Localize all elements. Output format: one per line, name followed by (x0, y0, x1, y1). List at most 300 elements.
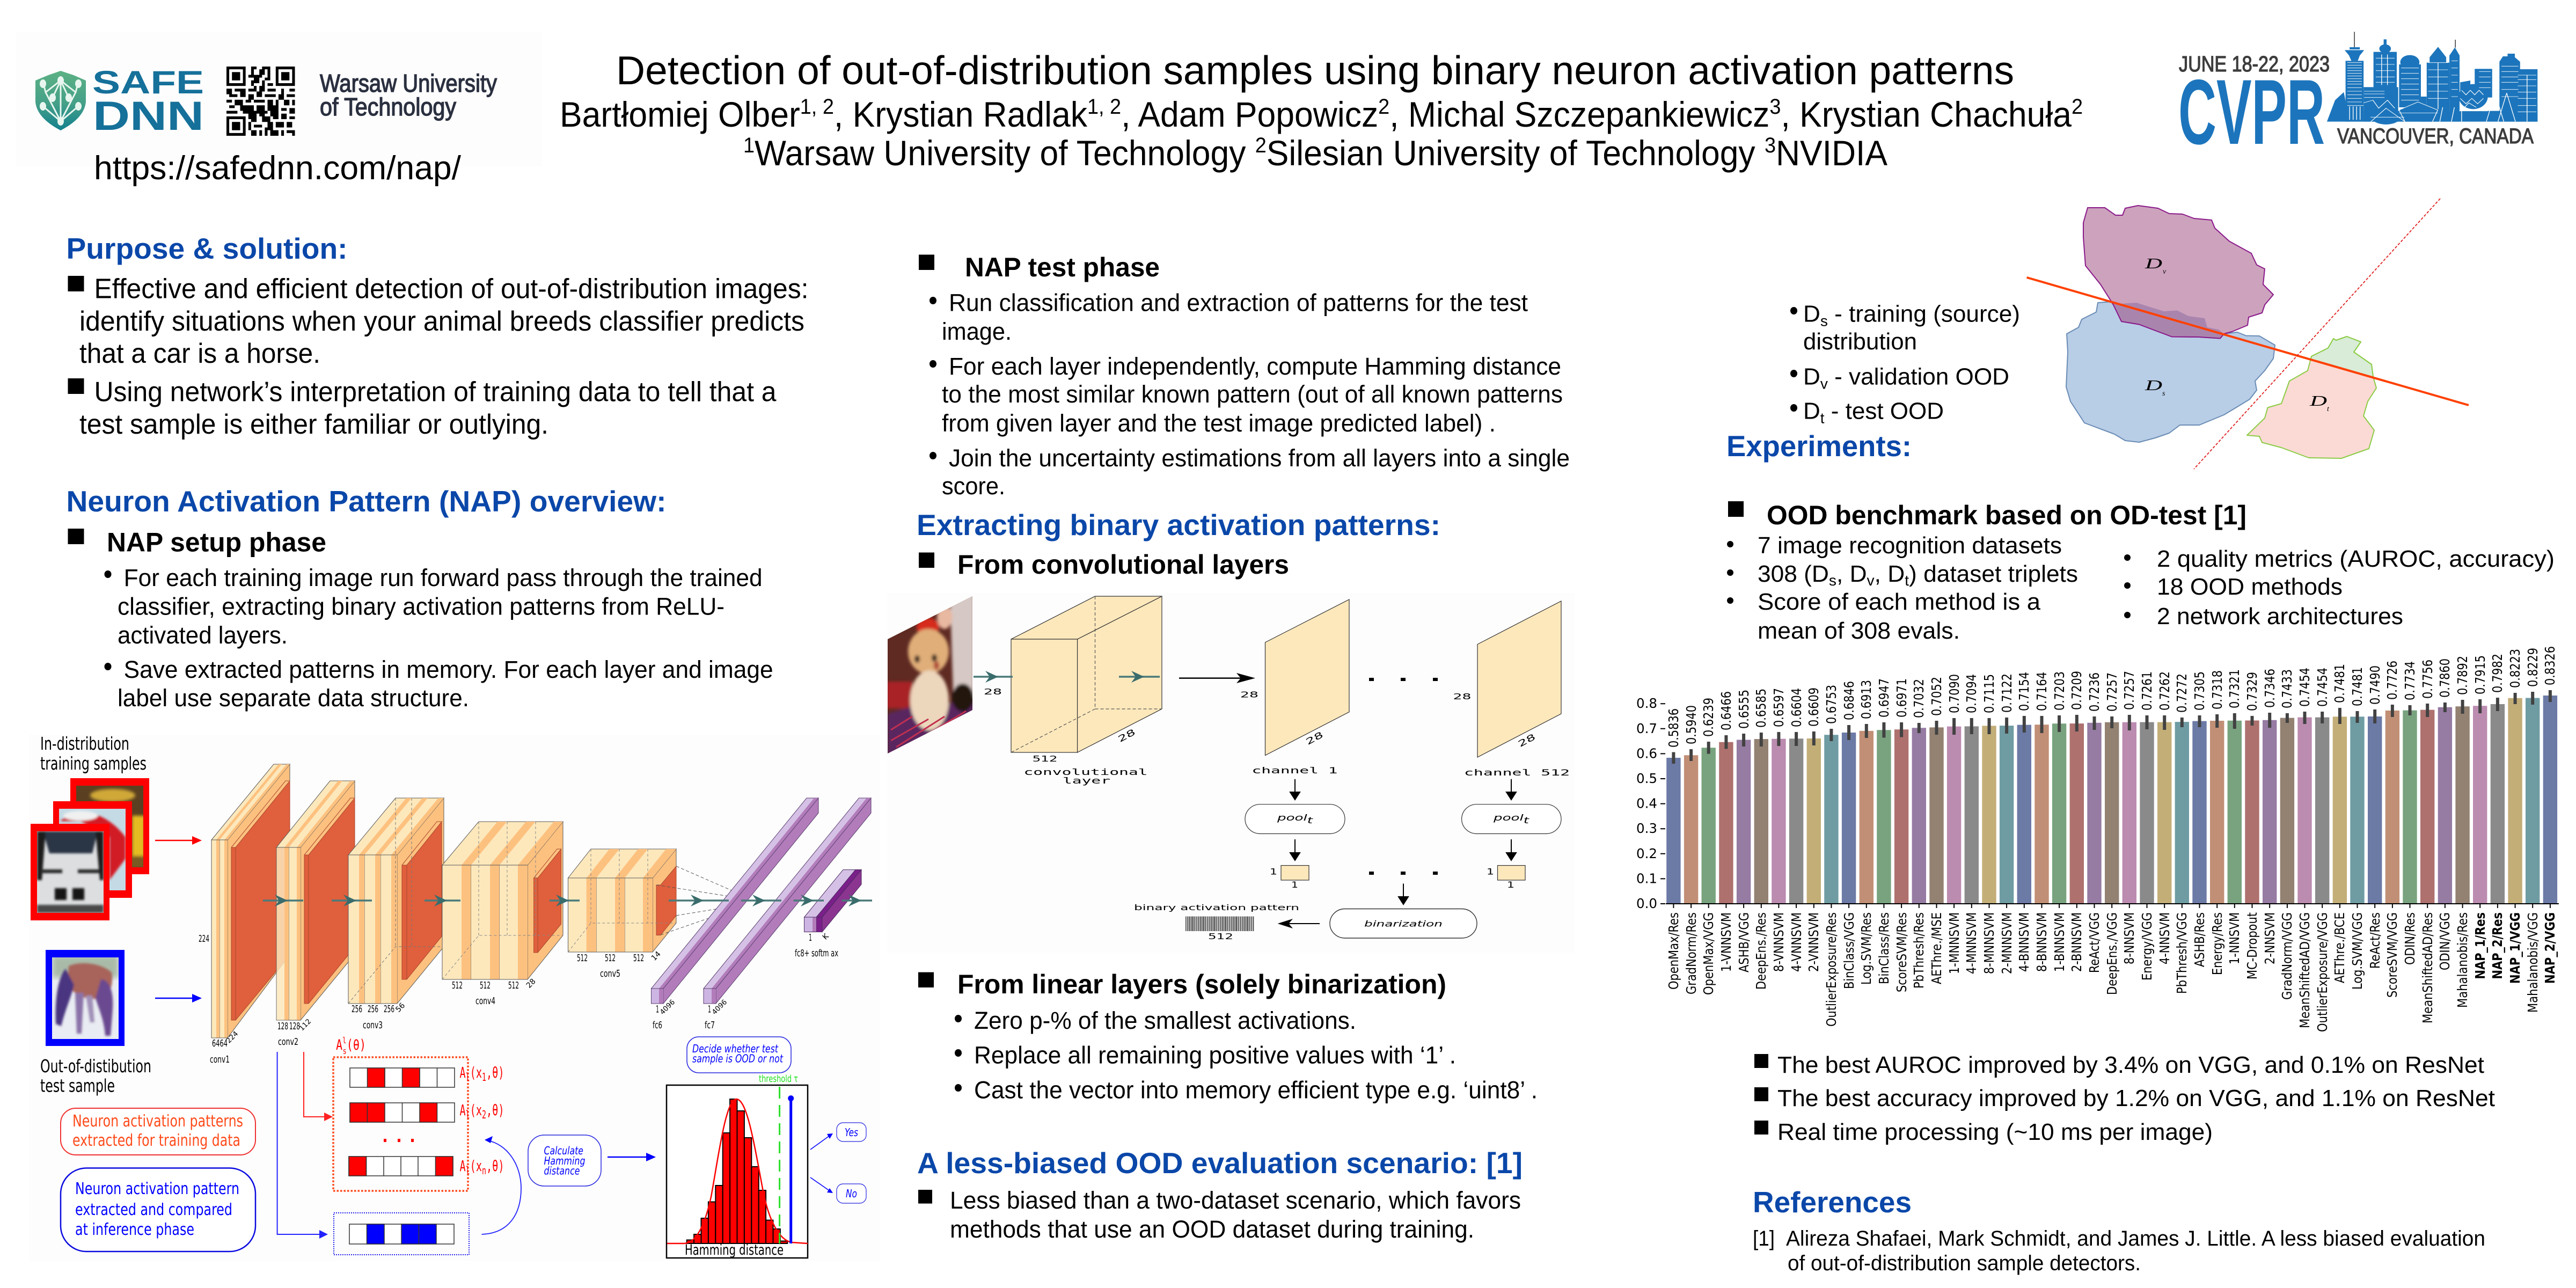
box: pool channel 1 (1245, 804, 1345, 834)
known activation patterns: l (466, 1164, 470, 1177)
labels: layer dimensions: 28 (1453, 692, 1472, 701)
method labels: ASHB/Res (2192, 912, 2207, 967)
image: out-of-distribution test sample with blue frame (46, 950, 125, 1046)
known activation patterns: s (343, 1046, 347, 1056)
value labels: 0.7257 (2104, 672, 2120, 712)
value labels: 0.6597 (1771, 688, 1787, 727)
value labels (1666, 646, 2558, 748)
callout: inference pattern: extracted and compared (75, 1201, 232, 1219)
labels: distribution symbols: v (2163, 268, 2167, 276)
title block: , Adam Popowicz (1121, 94, 1378, 134)
box: decide whether OOD: Decide whether test (692, 1042, 779, 1055)
labels: network dimensions: fc8+ softm ax (795, 948, 838, 959)
method labels: Mahalanobis/Res (2455, 912, 2470, 1008)
known activation patterns: 2 (482, 1108, 486, 1121)
panel: OOD benchmark: 2 quality metrics (AUROC, accuracy) (2157, 546, 2555, 572)
label: in-distribution samples: training samples (40, 753, 147, 774)
legend: distributions: v (1820, 376, 1828, 392)
method labels: MeanShiftedAD/Res (2420, 912, 2435, 1023)
labels: network dimensions: conv1 (210, 1054, 230, 1065)
box: calculate Hamming distance: distance (544, 1165, 580, 1177)
method labels: ASHB/VGG (1736, 912, 1752, 972)
y axis labels: 0.0 (1636, 896, 1657, 911)
value labels: 0.7164 (2034, 672, 2050, 711)
known activation patterns: A (336, 1037, 345, 1053)
label: out-of-distribution sample: test sample (40, 1075, 115, 1096)
panel: NAP test phase: score. (942, 472, 1005, 500)
panel: NAP overview: NAP setup phase (107, 527, 326, 557)
known activation patterns: (x (470, 1101, 482, 1119)
method labels: 8-NNSVM (2121, 912, 2137, 964)
callout: inference pattern: at inference phase (75, 1220, 194, 1239)
value labels: 0.7257 (2121, 671, 2137, 710)
value labels: 0.7490 (2367, 665, 2383, 705)
labels: distribution symbols: t (2327, 405, 2330, 413)
value labels: 0.7209 (2069, 671, 2084, 710)
value labels: 0.6609 (1806, 687, 1821, 727)
labels: layer dimensions: convolutional (1024, 767, 1147, 777)
value labels: 0.7122 (1999, 674, 2015, 713)
title block (560, 48, 2083, 173)
value labels: 0.6913 (1858, 680, 1874, 719)
value labels: 0.7481 (2332, 664, 2347, 703)
labels: network dimensions: K (821, 932, 831, 942)
panel: OOD benchmark: , D (1836, 561, 1867, 587)
method labels: Energy/VGG (2139, 912, 2155, 980)
method labels: AEThre./BCE (2332, 912, 2347, 983)
labels: layer dimensions: 28 (1516, 731, 1537, 749)
box: calculate Hamming distance: Calculate (544, 1144, 583, 1157)
value labels: 0.7756 (2420, 660, 2435, 699)
panel: purpose and solution: Using network’s interpretation of training data to tell that a (94, 377, 777, 408)
logo: SafeDNN: DNN (93, 93, 204, 139)
binary activation pattern (1134, 904, 1299, 941)
panel: NAP overview: activated layers. (118, 621, 288, 649)
heading: less-biased scenario: A less-biased OOD evaluation scenario: [1] (917, 1146, 1523, 1180)
value labels: 0.7346 (2262, 669, 2278, 708)
heading: NAP overview: Neuron Activation Pattern (NAP) overview: (67, 485, 667, 518)
box: calculate Hamming distance: Hamming (544, 1154, 585, 1167)
panel: NAP test phase: from given layer and the test image predicted label) . (942, 409, 1496, 437)
scalars after pooling (1270, 866, 1525, 890)
chart: Hamming distance histogram: Hamming distance (685, 1242, 784, 1258)
method labels: Mahalanobis/VGG (2525, 912, 2541, 1013)
binary activation pattern: 512 (1208, 932, 1233, 941)
arrow: training input (155, 836, 202, 845)
y axis labels: 0.4 (1636, 796, 1657, 811)
value labels: 0.8326 (2542, 646, 2558, 685)
panel: purpose and solution: Effective and efficient detection of out-of-distribution images: (94, 274, 808, 305)
labels: network dimensions: 112 (298, 1018, 313, 1033)
callout: inference pattern (61, 1168, 255, 1252)
panel: NAP test phase (919, 252, 1570, 500)
method labels: DeepEns./Res (1753, 912, 1769, 990)
arrow: to channels (1179, 673, 1255, 683)
logo: CVPR 2023: VANCOUVER, CANADA (2337, 125, 2534, 148)
value labels: 0.7329 (2244, 672, 2260, 711)
y axis labels: 0.5 (1636, 771, 1657, 786)
image stack: training samples with red frames (31, 778, 149, 920)
legend: distributions: - training (source) (1828, 301, 2020, 327)
block: conv2 (276, 781, 355, 1020)
labels: layer dimensions (984, 687, 1570, 786)
panel: less-biased scenario (917, 1146, 1523, 1243)
method labels: NAP_1/VGG (2507, 912, 2523, 984)
value labels: 0.7032 (1911, 679, 1927, 718)
panel: from linear layers: Cast the vector into memory efficient type e.g. ‘uint8’ . (974, 1077, 1538, 1103)
panel: from linear layers: Zero p-% of the smallest activations. (974, 1007, 1356, 1034)
scalars after pooling: 1 (1291, 880, 1298, 890)
labels: network dimensions: 4096 (711, 998, 729, 1016)
scalars after pooling: 1 (1487, 867, 1494, 877)
box: pool channel 512: t (1524, 815, 1529, 825)
panel: NAP overview: For each training image run forward pass through the trained (124, 564, 763, 591)
value labels: 0.5940 (1684, 705, 1699, 744)
logo: Warsaw University of Technology: of Technology (320, 93, 456, 121)
value labels: 0.7094 (1964, 674, 1979, 713)
label: in-distribution samples (40, 733, 147, 774)
error bars (1673, 690, 2550, 764)
block: conv4 (442, 822, 563, 979)
bars (1673, 696, 2550, 904)
panel: OOD benchmark (1727, 500, 2555, 644)
labels: network dimensions: 1 (708, 1004, 711, 1015)
labels: network dimensions: 28 (525, 977, 538, 990)
method labels: 1-MNNSVM (1946, 912, 1962, 974)
known activation patterns: n (482, 1164, 486, 1177)
labels: layer dimensions: 28 (1240, 690, 1258, 700)
value labels: 0.7261 (2139, 671, 2155, 711)
box: pool channel 512 (1462, 804, 1561, 834)
value labels: 0.6555 (1736, 690, 1752, 729)
panel: from linear layers: From linear layers (solely binarization) (957, 969, 1446, 999)
logo: Warsaw University of Technology (320, 69, 497, 121)
labels: network dimensions: 224 (225, 1030, 240, 1045)
diagram: binary pattern extraction (885, 593, 1570, 941)
value labels: 0.6947 (1876, 678, 1892, 718)
panel: NAP overview: Save extracted patterns in memory. For each layer and image (124, 656, 773, 683)
panel: OOD benchmark: , D (1875, 561, 1905, 587)
panel: NAP test phase: to the most similar known pattern (out of all known patterns (942, 380, 1563, 408)
method labels: 1-BNNSVM (2052, 912, 2067, 972)
legend: distributions: s (1820, 312, 1828, 330)
panel: NAP test phase: image. (942, 318, 1012, 345)
labels: network dimensions: 4096 (658, 998, 677, 1016)
y axis labels: 0.3 (1636, 821, 1657, 836)
method labels: Energy/Res (2209, 912, 2225, 975)
panel: references: Alireza Shafaei, Mark Schmidt, and James J. Little. A less biased evaluation (1786, 1227, 2485, 1250)
method labels: 8-VNNSVM (1771, 912, 1787, 972)
method labels: 4-MNNSVM (1964, 912, 1979, 974)
labels: network dimensions: 512 (480, 980, 491, 991)
known activation patterns: (x (470, 1064, 482, 1081)
panel: OOD benchmark: s (1829, 572, 1836, 589)
method labels: ODIN/Res (2402, 912, 2418, 965)
title block: Warsaw University of Technology (755, 133, 1255, 173)
labels: network dimensions: 512 (508, 980, 519, 991)
legend: distributions: - validation OOD (1828, 364, 2009, 390)
labels: network dimensions: 256 (368, 1004, 378, 1015)
title block: 2 (1255, 134, 1267, 157)
block: conv1 (211, 764, 290, 1038)
labels: distribution symbols: D (2309, 393, 2328, 409)
labels: distribution symbols: s (2162, 390, 2165, 398)
scalars after pooling: 1 (1507, 880, 1514, 890)
y axis labels: 0.1 (1636, 870, 1657, 886)
title block: 2 (1378, 95, 1389, 119)
method labels: NAP_2/VGG (2542, 912, 2558, 984)
block: conv5 (568, 849, 731, 952)
method labels: OpenMax/Res (1666, 912, 1681, 990)
method labels (1666, 912, 2558, 1032)
project URL: https://safednn.com/nap/ (94, 149, 462, 187)
panel: extracting binary activation patterns: From convolutional layers (957, 550, 1289, 580)
callout: training patterns: extracted for training data (72, 1131, 240, 1150)
arrow: no (810, 1177, 833, 1193)
value labels: 0.7915 (2472, 655, 2488, 694)
panel: NAP overview: classifier, extracting binary activation patterns from ReLU- (118, 593, 724, 620)
test activation pattern (334, 1213, 469, 1255)
label: out-of-distribution sample (40, 1056, 151, 1096)
legend: distributions: D (1803, 301, 1820, 327)
panel: references: [1] (1753, 1227, 1775, 1250)
labels: network dimensions: 128 (277, 1021, 288, 1032)
method labels: PbThresh/VGG (2174, 912, 2190, 994)
arrows: through the layer (974, 671, 1160, 683)
diagram: VGG network with NAP pipeline (31, 733, 872, 1258)
panel: purpose and solution (67, 232, 808, 440)
method labels: BinClass/VGG (1841, 912, 1857, 989)
box: decide whether OOD: sample is OOD or not (692, 1052, 784, 1065)
labels: layer dimensions: layer (1063, 775, 1111, 786)
labels: layer dimensions: 28 (984, 687, 1002, 697)
known activation patterns: ,θ) (486, 1101, 504, 1119)
value labels: 0.7860 (2437, 658, 2453, 698)
title block: 1, 2 (800, 95, 834, 119)
method labels: 2-BNNSVM (2069, 912, 2084, 972)
callout: inference pattern: Neuron activation pattern (75, 1180, 239, 1198)
bar chart: AUROC by method (1636, 646, 2559, 1032)
diagram: source, validation and test distributions (2026, 199, 2469, 469)
labels: layer dimensions: channel 1 (1252, 765, 1337, 775)
value labels: 0.7734 (2402, 661, 2418, 700)
labels: network dimensions: 512 (577, 953, 588, 964)
panel: purpose and solution: test sample is either familiar or outlying. (79, 409, 548, 440)
value labels: 0.6753 (1824, 685, 1839, 724)
method labels: 8-BNNSVM (2034, 912, 2050, 972)
logo: CVPR 2023: JUNE 18-22, 2023 (2179, 52, 2330, 76)
block: fc7 (704, 798, 871, 1004)
value labels: 0.7481 (2350, 667, 2365, 706)
labels: network dimensions: conv4 (475, 996, 495, 1007)
arrows: network flow (263, 895, 872, 906)
panel: references (1753, 1185, 2485, 1275)
panel: OOD benchmark: t (1905, 572, 1909, 589)
legend: distributions (1790, 301, 2020, 426)
value labels: 0.6466 (1718, 691, 1734, 730)
method labels: OutlierExposure/Res (1824, 912, 1839, 1027)
known activation patterns: A (459, 1101, 469, 1119)
method labels: 4-NNSVM (2157, 912, 2172, 964)
value labels: 0.6971 (1894, 678, 1909, 718)
arrows: channel to pool (1290, 779, 1516, 800)
labels: network dimensions: 14 (650, 950, 663, 963)
arrow: to pattern (1279, 920, 1320, 927)
labels: network dimensions: fc6 (653, 1020, 662, 1031)
panel: NAP overview (67, 485, 773, 712)
callout: training patterns (61, 1108, 255, 1155)
label: in-distribution samples: In-distribution (40, 733, 129, 754)
panel: OOD benchmark: ) dataset triplets (1909, 561, 2078, 587)
arrow: to binarization (1399, 883, 1408, 904)
title block: 2 (2072, 95, 2083, 119)
known activation patterns: A (459, 1064, 469, 1081)
panel: NAP test phase: NAP test phase (965, 252, 1160, 282)
known activation patterns: l (466, 1071, 470, 1084)
value labels: 0.7318 (2209, 670, 2225, 709)
box: pool channel 512: pool (1494, 813, 1512, 823)
panel: from linear layers: Replace all remaining positive values with ‘1’ . (974, 1042, 1456, 1069)
value labels: 0.7115 (1981, 674, 1997, 713)
title block: Bartłomiej Olber (560, 94, 814, 134)
block: convolutional layer (1011, 596, 1162, 752)
arrow: test input (155, 994, 202, 1002)
panel: results summary: The best AUROC improved by 3.4% on VGG, and 0.1% on ResNet (1777, 1052, 2484, 1078)
y axis labels: 0.7 (1636, 721, 1657, 736)
arrow: to histogram (608, 1153, 656, 1161)
labels: distribution symbols (2144, 255, 2330, 413)
legend: distributions: D (1803, 364, 1820, 390)
title block: NVIDIA (1776, 133, 1887, 173)
legend: distributions: D (1803, 398, 1820, 424)
method labels: OutlierExposure/VGG (2315, 912, 2330, 1032)
labels: network dimensions: 256 (384, 1004, 394, 1015)
value labels: 0.7154 (2016, 672, 2032, 711)
labels: network dimensions: conv2 (278, 1036, 298, 1048)
panel: results summary: Real time processing (~10 ms per image) (1777, 1119, 2213, 1145)
panel: OOD benchmark: v (1867, 572, 1875, 589)
value labels: 0.8223 (2507, 649, 2523, 688)
method labels: OpenMax/VGG (1701, 912, 1716, 995)
method labels: 4-VNNSVM (1789, 912, 1804, 972)
title block: 1, 2 (1087, 95, 1121, 119)
chart: Hamming distance histogram: threshold τ (759, 1073, 798, 1085)
method labels: ReAct/Res (2367, 912, 2383, 969)
labels: network dimensions: fc7 (705, 1020, 715, 1031)
blob: source distribution (2066, 302, 2275, 442)
box: yes (837, 1123, 866, 1141)
value labels: 0.7090 (1946, 674, 1962, 713)
value labels: 0.5836 (1666, 708, 1681, 748)
arrows: pool to scalar (1290, 839, 1516, 860)
value labels: 0.6585 (1753, 689, 1769, 728)
panel: less-biased scenario: methods that use an OOD dataset during training. (950, 1216, 1474, 1243)
panel: purpose and solution: identify situations when your animal breeds classifier predicts (79, 306, 804, 337)
decision boundaries (2026, 199, 2469, 469)
method labels: GradNorm/VGG (2279, 912, 2295, 1000)
y axis labels: 0.8 (1636, 696, 1657, 711)
box: binarization: binarization (1364, 919, 1443, 928)
value labels: 0.7982 (2490, 654, 2505, 693)
panel: NAP test phase: Join the uncertainty estimations from all layers into a single (949, 444, 1570, 472)
method labels: GradNorm/Res (1684, 912, 1699, 994)
value labels: 0.7262 (2157, 671, 2172, 711)
y axis labels (1636, 696, 1657, 911)
y axis labels: 0.6 (1636, 745, 1657, 761)
heading: purpose and solution: Purpose & solution: (67, 232, 348, 265)
labels: network dimensions: conv5 (600, 968, 620, 979)
title block: Detection of out-of-distribution samples using binary neuron activation patterns (616, 48, 2014, 93)
label: out-of-distribution sample: Out-of-distibution (40, 1056, 151, 1077)
known activation patterns: (θ) (347, 1037, 366, 1053)
value labels: 0.7052 (1929, 677, 1944, 716)
labels: network dimensions: 256 (352, 1004, 362, 1015)
value labels: 0.7454 (2315, 668, 2330, 707)
method labels: 2-VNNSVM (1806, 912, 1821, 972)
panel: OOD benchmark: 2 network architectures (2157, 603, 2403, 630)
labels: network dimensions (199, 932, 838, 1065)
labels: network dimensions: 56 (394, 1001, 407, 1014)
panel: OOD benchmark: Score of each method is a (1758, 589, 2041, 615)
box: pool channel 1: t (1307, 815, 1313, 825)
method labels: AEThre./MSE (1929, 912, 1944, 984)
value labels: 0.7305 (2192, 671, 2207, 711)
value labels: 0.7236 (2087, 672, 2102, 712)
method labels: Log.SVM/VGG (2350, 912, 2365, 990)
labels: network dimensions: 1 (656, 1004, 659, 1015)
value labels: 0.6604 (1789, 688, 1804, 727)
image: kitten input (885, 593, 974, 757)
heading: experiments: Experiments: (1726, 429, 1912, 463)
connector: training patterns extracted (304, 1052, 333, 1121)
labels: distribution symbols: D (2144, 255, 2163, 272)
block: fc8 softmax (804, 870, 861, 932)
box: yes: Yes (845, 1126, 858, 1139)
known activation patterns: l (342, 1035, 346, 1045)
panel: results summary: The best accuracy improved by 1.2% on VGG, and 1.1% on ResNet (1777, 1085, 2495, 1111)
method labels: ODIN/VGG (2437, 912, 2453, 970)
method labels: Log.SVM/Res (1858, 912, 1874, 985)
labels: network dimensions: conv3 (363, 1020, 383, 1031)
panel: less-biased scenario: Less biased than a two-dataset scenario, which favors (950, 1187, 1521, 1214)
legend: distributions: - test OOD (1825, 398, 1944, 424)
known activation patterns: ,θ) (486, 1064, 504, 1081)
connector: test pattern extracted (277, 1052, 328, 1239)
known activation patterns: ,θ) (486, 1157, 504, 1175)
known activation patterns: l (466, 1108, 470, 1121)
method labels: BinClass/Res (1876, 912, 1892, 984)
heading: references: References (1753, 1185, 1912, 1219)
value labels: 0.6846 (1841, 681, 1857, 720)
known activation patterns: A (459, 1157, 469, 1175)
legend: distributions: distribution (1803, 328, 1917, 355)
title block: 1 (743, 134, 755, 157)
method labels: PbThresh/Res (1911, 912, 1927, 989)
y axis labels: 0.2 (1636, 846, 1657, 861)
labels: network dimensions: 128 (289, 1021, 300, 1032)
panel: purpose and solution: that a car is a horse. (79, 338, 320, 369)
labels: network dimensions: 1 (809, 932, 812, 943)
title block: Silesian University of Technology (1267, 133, 1765, 173)
panel: OOD benchmark: 7 image recognition datasets (1758, 532, 2062, 559)
method labels: NAP_2/Res (2490, 912, 2505, 979)
logo: CVPR 2023: CVPR (2178, 61, 2325, 164)
labels: network dimensions: 224 (199, 933, 209, 945)
panel: results summary (1754, 1052, 2495, 1145)
logo: SafeDNN (35, 64, 204, 139)
arrow: yes (810, 1133, 833, 1150)
labels: distribution symbols: D (2144, 377, 2163, 393)
